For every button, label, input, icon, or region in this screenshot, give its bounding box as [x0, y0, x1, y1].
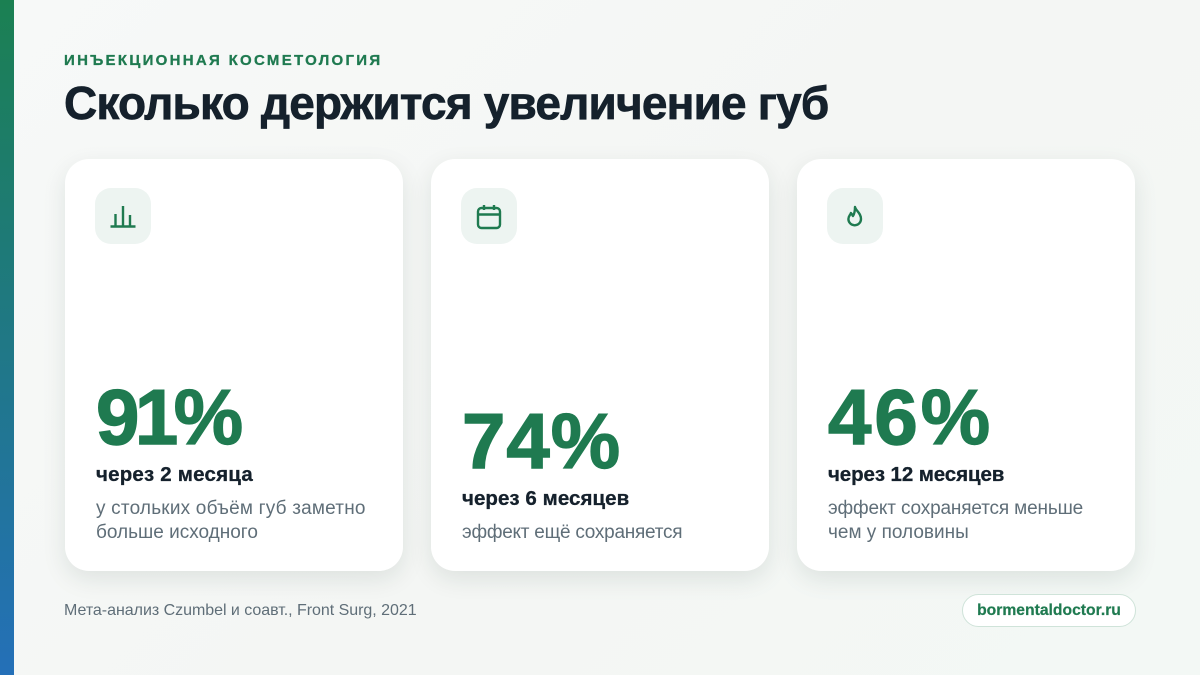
site badge	[962, 594, 1136, 627]
icon: calendar	[461, 188, 517, 244]
stat: 46%: 46%	[828, 373, 993, 461]
description: у стольких объём губ заметно	[96, 498, 366, 519]
icon: bar chart	[95, 188, 151, 244]
icon: flame	[827, 188, 883, 244]
card: 12 months	[797, 159, 1135, 571]
site badge: bormentaldoctor.ru	[977, 602, 1121, 619]
period: 12 months: через 12 месяцев	[828, 463, 1004, 486]
description: больше исходного	[96, 522, 258, 543]
eyebrow label: ИНЪЕКЦИОННАЯ КОСМЕТОЛОГИЯ	[64, 52, 382, 69]
left gradient stripe	[0, 0, 14, 675]
description: чем у половины	[828, 522, 969, 543]
card: 6 months	[431, 159, 769, 571]
stat: 74%: 74%	[462, 397, 621, 485]
description: эффект ещё сохраняется	[462, 522, 682, 543]
period: 6 months: через 6 месяцев	[462, 487, 629, 510]
source note: Мета-анализ Czumbel и соавт., Front Surg, 2021	[64, 602, 417, 619]
description: эффект сохраняется меньше	[828, 498, 1083, 519]
description	[828, 498, 1083, 543]
title: Сколько держится увеличение губ	[64, 77, 828, 129]
stat: 91%: 91%	[96, 373, 239, 461]
period: 2 months: через 2 месяца	[96, 463, 253, 486]
card: 2 months	[65, 159, 403, 571]
description	[96, 498, 366, 543]
